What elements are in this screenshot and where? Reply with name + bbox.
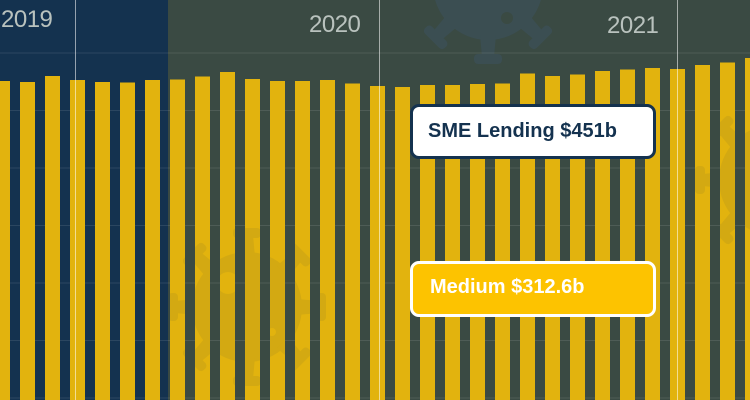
background: pandemic period	[168, 0, 750, 400]
year label 2021: 2021	[607, 12, 658, 39]
callout: SME lending total	[410, 104, 656, 159]
callout: medium business lending: Medium $312.6b	[430, 276, 585, 298]
year label 2020: 2020	[309, 11, 360, 38]
callout: medium business lending	[410, 261, 656, 317]
icon: virus watermark top	[409, 0, 567, 64]
callout: SME lending total: SME Lending $451b	[428, 120, 617, 142]
icon: virus watermark over bars, centre	[168, 228, 326, 386]
icon: virus watermark over bars, right	[695, 116, 750, 244]
background: 2019 navy period	[0, 0, 168, 400]
year label 2019: 2019	[1, 6, 52, 33]
